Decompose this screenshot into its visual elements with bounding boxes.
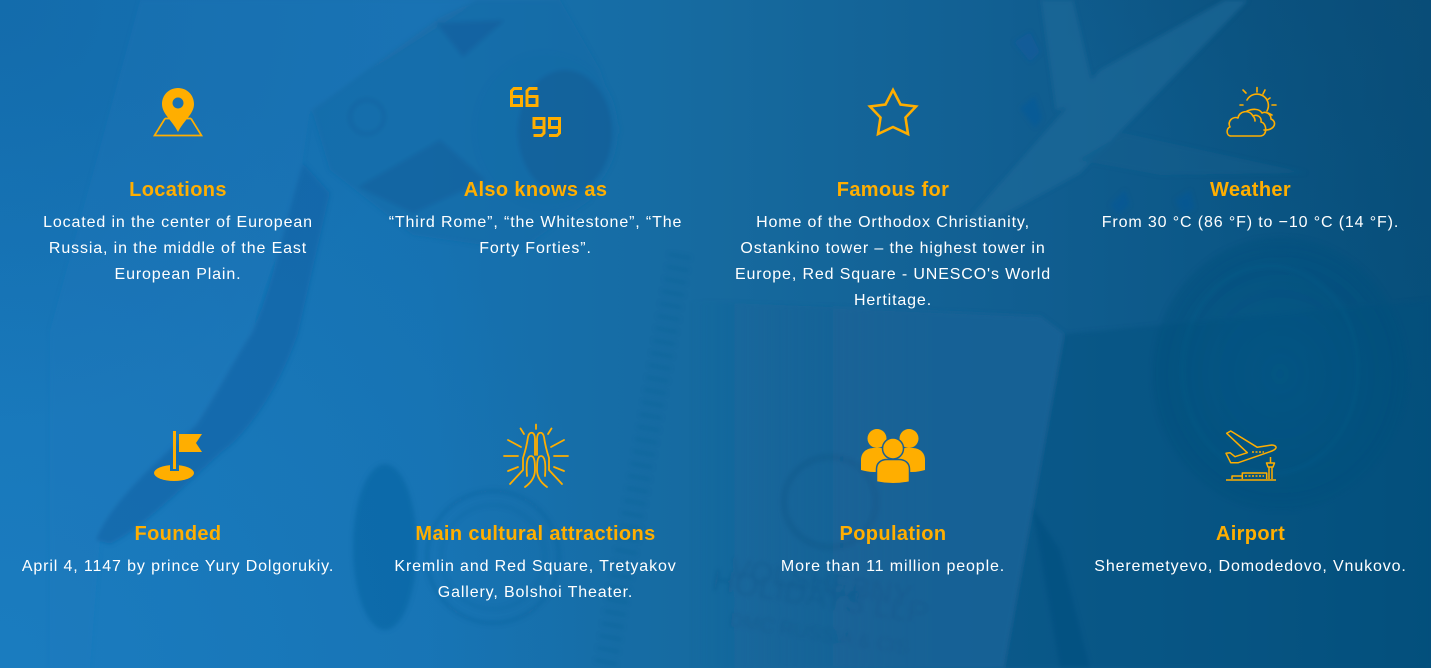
text: attractions description: Kremlin and Red Square, Tretyakov — [394, 558, 677, 575]
panel: Famous for — [735, 179, 1051, 309]
icon: group of people — [861, 429, 925, 483]
background photo: travel flat-lay tinted blue: VOLSHEBNY — [728, 552, 914, 614]
panel: Airport — [1094, 523, 1407, 575]
panel: Also knows as — [389, 179, 682, 257]
heading: Locations: Locations — [129, 179, 227, 201]
heading: Airport: Airport — [1216, 523, 1285, 545]
text: attractions description: Gallery, Bolshoi Theater. — [438, 584, 633, 601]
text: Airport description: Sheremetyevo, Domodedovo, Vnukovo. — [1094, 558, 1407, 575]
text: Also knows as description: Forty Forties”. — [479, 240, 592, 257]
icon: star — [867, 87, 919, 136]
text: Locations description — [43, 214, 313, 283]
compass — [353, 464, 417, 630]
icon: flag on hole — [154, 431, 202, 481]
camera — [312, 0, 620, 250]
text: Also knows as description — [389, 214, 682, 257]
text: Locations description: European Plain. — [115, 266, 241, 283]
panel: Locations — [43, 179, 313, 283]
heading: Weather: Weather — [1210, 179, 1291, 201]
plane — [1041, 0, 1096, 110]
icon: praying hands — [503, 424, 569, 488]
pen — [1032, 507, 1090, 668]
icon: plane and airport — [1225, 430, 1277, 481]
text: Famous for description — [735, 214, 1051, 309]
panel: Founded — [22, 523, 334, 575]
heading: Main cultural attractions: Main cultural attractions — [415, 523, 656, 545]
text: Famous for description: Home of the Orthodox Christianity, — [756, 214, 1030, 231]
heading: Population: Population — [840, 523, 946, 545]
text: Also knows as description: “Third Rome”, “the Whitestone”, “The — [389, 214, 682, 231]
text: Locations description: Russia, in the middle of the East — [49, 240, 307, 257]
text: Founded description: April 4, 1147 by prince Yury Dolgorukiy. — [22, 558, 334, 575]
heading: Founded: Founded — [135, 523, 221, 545]
panel: Population — [781, 430, 1005, 575]
text: Famous for description: Europe, Red Square - UNESCO's World — [735, 266, 1051, 283]
icon: quotation marks — [510, 87, 561, 137]
text: Famous for description: Hertitage. — [854, 292, 932, 309]
map pins — [1014, 32, 1040, 62]
text: Locations description: Located in the center of European — [43, 214, 313, 231]
logo — [784, 457, 876, 547]
heading: Famous for: Famous for — [837, 179, 949, 201]
text: attractions description — [394, 558, 677, 601]
panel: Main cultural attractions — [394, 523, 677, 601]
glass — [1152, 237, 1408, 511]
text: Famous for description: Ostankino tower – the highest tower in — [740, 240, 1046, 257]
spiral binding — [605, 255, 680, 668]
text: Weather description: From 30 °C (86 °F) to −10 °C (14 °F). — [1102, 214, 1399, 231]
text: Population description: More than 11 million people. — [781, 558, 1005, 575]
icon: map pin — [153, 88, 203, 136]
panel: Weather — [1102, 179, 1399, 231]
background photo: travel flat-lay tinted blue: HOLIDAYS LLP — [710, 562, 931, 631]
strap — [96, 163, 330, 544]
background photo: travel flat-lay tinted blue: DMC RUSSIA & CIS — [727, 609, 911, 659]
icon: sun behind clouds — [1226, 86, 1277, 137]
heading: Also knows as: Also knows as — [464, 179, 607, 201]
